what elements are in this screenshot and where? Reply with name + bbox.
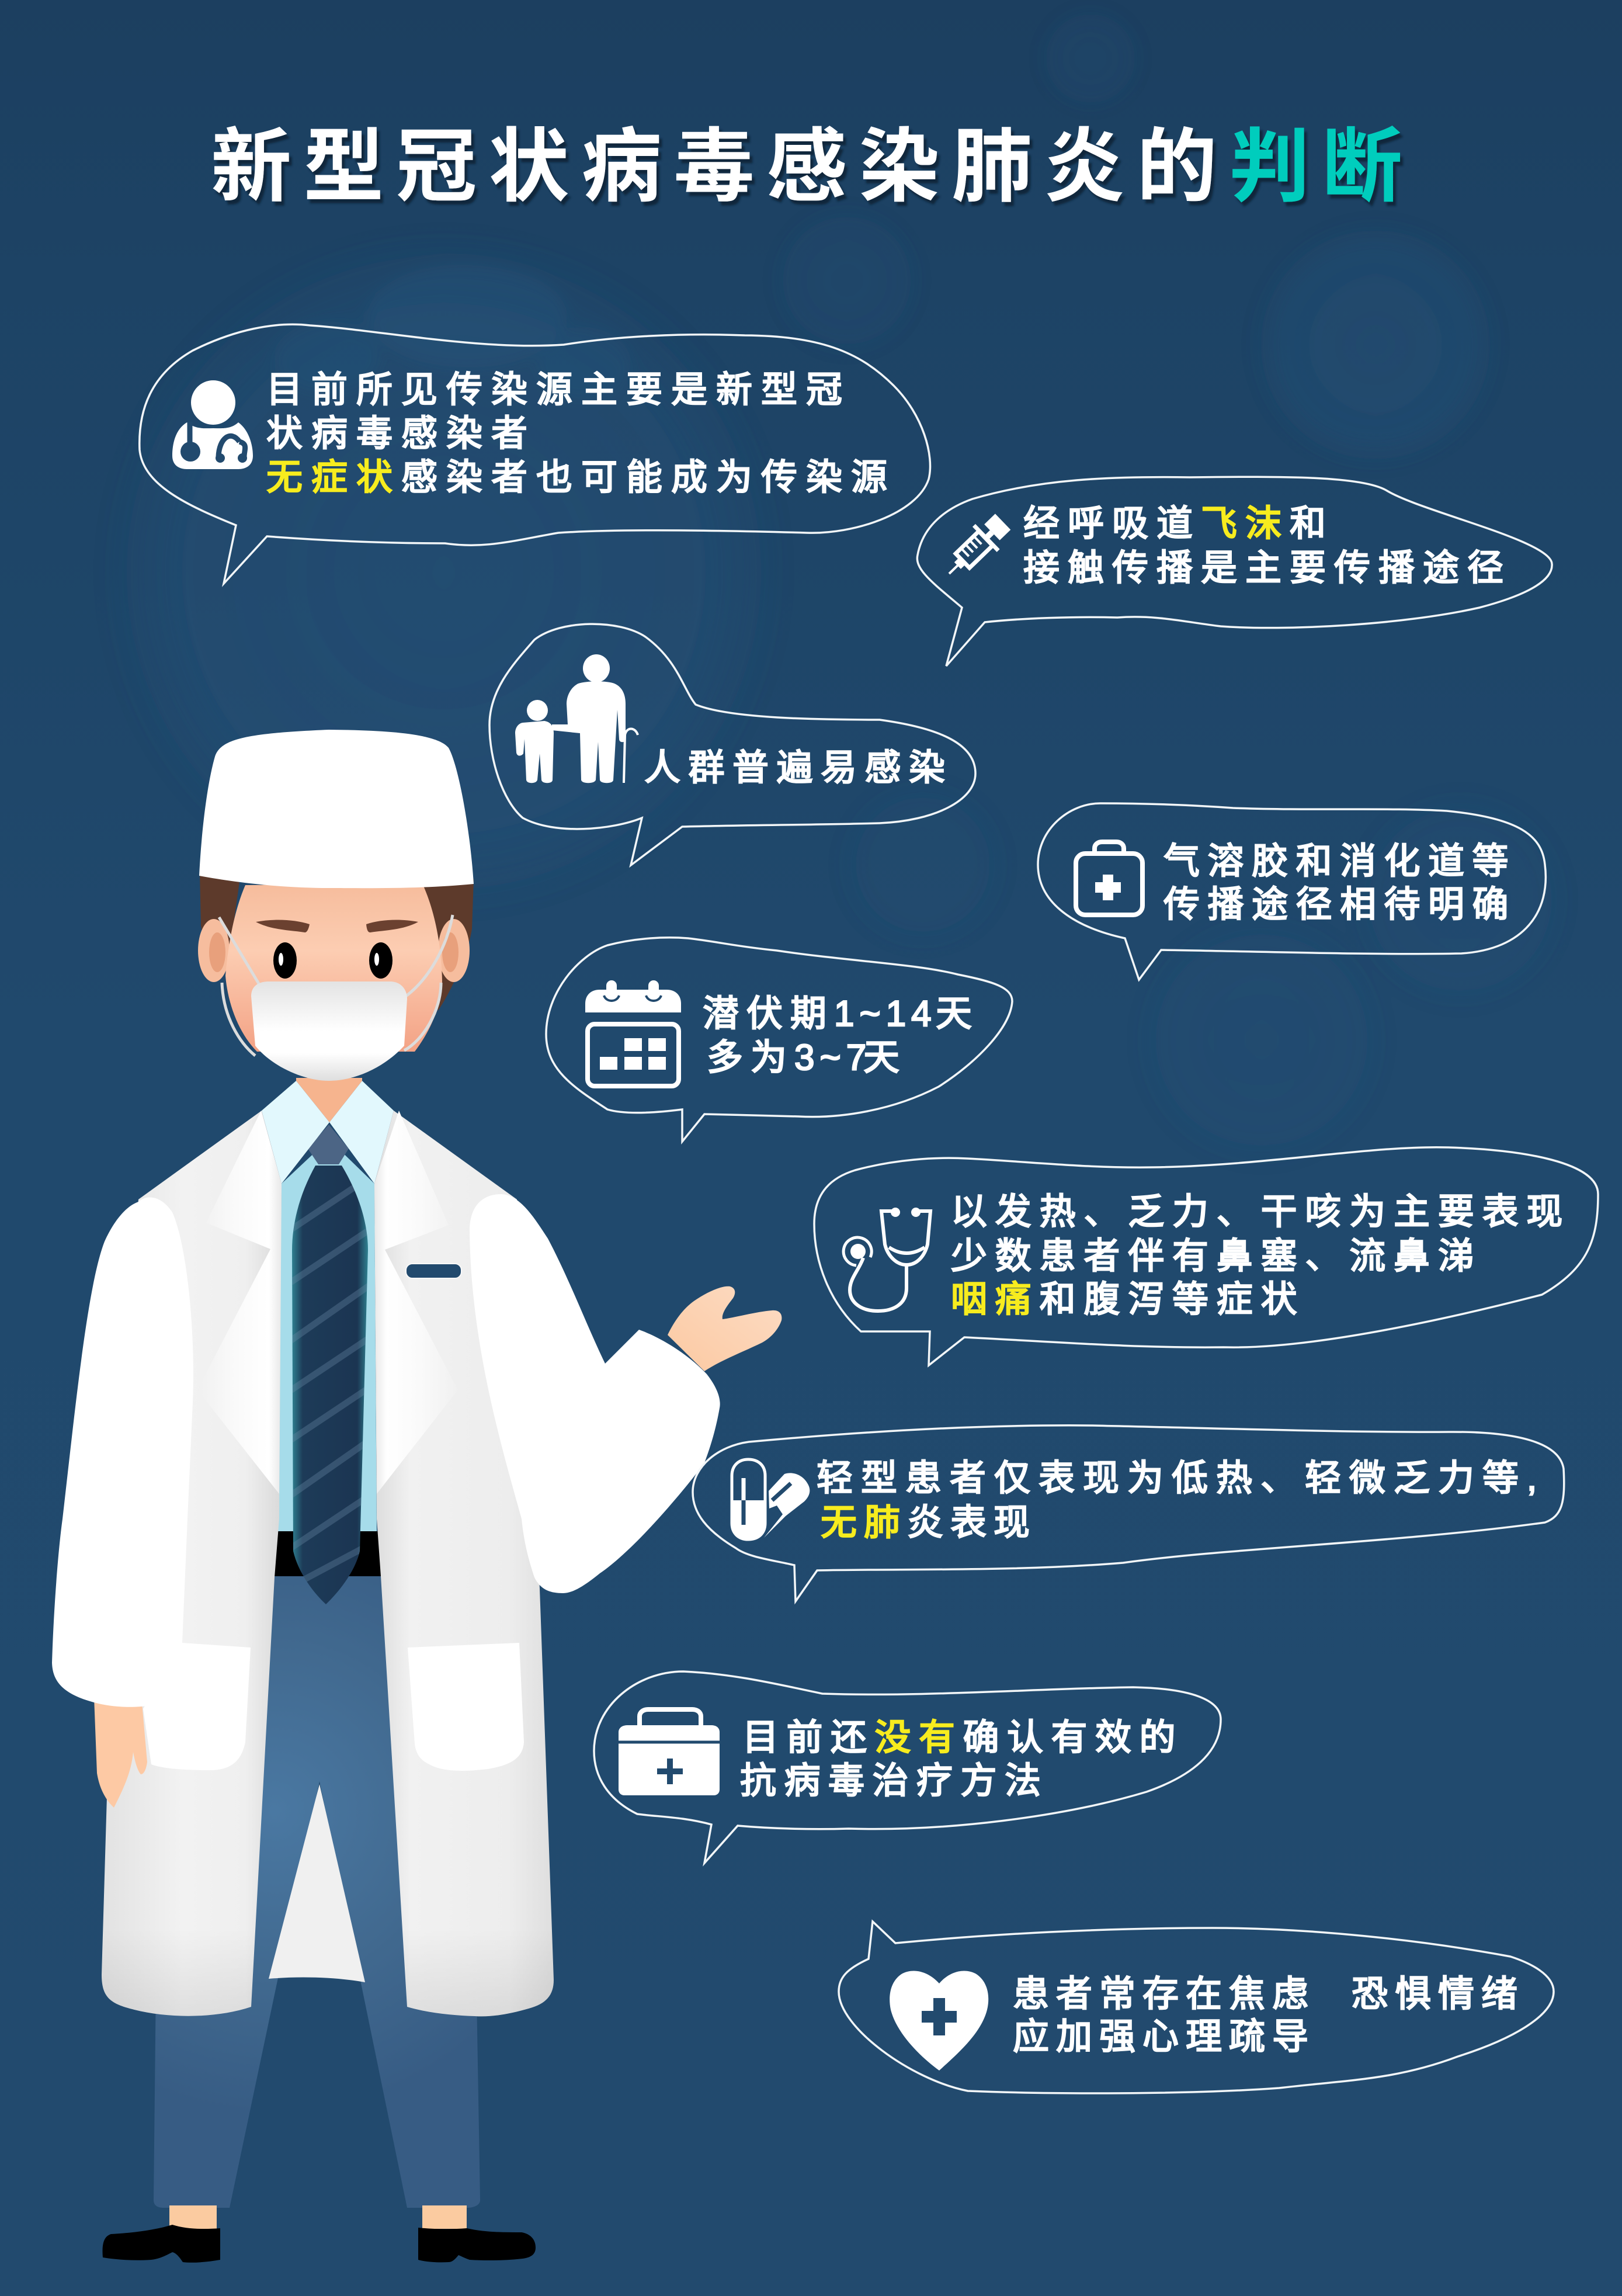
icon: first aid kit solid <box>619 1709 720 1795</box>
eyebrows <box>256 920 418 932</box>
left lapel <box>197 1111 282 1494</box>
speech bubble: mild patients <box>693 1426 1564 1601</box>
left sleeve <box>52 1198 193 1707</box>
hat <box>199 730 474 888</box>
face mask <box>251 981 407 1081</box>
title: 新型冠状病毒感染肺炎的判断 <box>211 122 1415 212</box>
bubble outline <box>693 1426 1564 1601</box>
bubble text: 目前所见传染源主要是新型冠 <box>266 370 851 410</box>
mask straps <box>219 915 453 1056</box>
bubble text: 目前还没有确认有效的 <box>742 1718 1183 1758</box>
speech bubble: general susceptibility <box>489 624 975 865</box>
left pocket <box>143 1643 251 1770</box>
speech bubble: symptoms <box>814 1147 1598 1365</box>
coat: right panel <box>374 1111 554 2016</box>
icon: syringe <box>937 509 1015 587</box>
bubble outline <box>1038 803 1545 980</box>
bubble text: 无症状感染者也可能成为传染源 <box>266 457 896 498</box>
icon: heart with cross <box>890 1971 988 2070</box>
coat inner back <box>269 1784 365 1982</box>
right sleeve <box>470 1194 720 1593</box>
doctor illustration <box>52 730 782 2263</box>
bubble outline <box>917 477 1552 666</box>
bubble text: 多为 <box>707 1038 794 1078</box>
right pocket <box>408 1643 524 1771</box>
ankles <box>169 2205 467 2229</box>
speech bubble: psychological support <box>839 1922 1554 2093</box>
left hand <box>94 1697 147 1808</box>
bubble text: 天 <box>863 1038 908 1078</box>
right shoe <box>418 2228 536 2262</box>
right lapel <box>374 1111 458 1494</box>
left ear <box>198 919 230 982</box>
bubble text: 气溶胶和消化道等 <box>1163 841 1516 882</box>
icon: doctor <box>172 380 253 469</box>
bubble text: 传播途径相待明确 <box>1163 885 1516 925</box>
bubble text: 应加强心理疏导 <box>1013 2017 1315 2057</box>
background: faint virus particles <box>99 6 1571 1168</box>
icon: medical case outline <box>1076 842 1142 915</box>
neck <box>296 1078 362 1122</box>
speech bubble: transmission routes <box>917 477 1552 666</box>
tie knot <box>308 1125 349 1164</box>
bubble text: 患者常存在焦虑 <box>1013 1974 1315 2014</box>
name badge <box>406 1264 461 1278</box>
tie <box>292 1166 368 1604</box>
speech bubble: aerosol routes <box>1038 803 1545 980</box>
bubble text: 接触传播是主要传播途径 <box>1023 548 1512 588</box>
bubble outline <box>814 1147 1598 1365</box>
hair <box>200 873 474 1011</box>
bubble text: 天 <box>936 994 981 1034</box>
bubble text: 少数患者伴有鼻塞、流鼻涕 <box>951 1236 1482 1277</box>
shirt <box>277 1139 377 1534</box>
right ear <box>438 919 470 982</box>
right hand <box>668 1286 782 1371</box>
belt <box>275 1531 383 1576</box>
bubble outline <box>140 324 930 584</box>
bubble text: 恐惧情绪 <box>1352 1974 1524 2014</box>
bubble text: 经呼吸道飞沫和 <box>1023 504 1334 544</box>
bubble text: 抗病毒治疗方法 <box>740 1761 1049 1801</box>
bubble text: 以发热、乏力、干咳为主要表现 <box>951 1192 1571 1232</box>
coat hem shading <box>102 1577 554 2016</box>
bubble text: 3~7 <box>794 1038 871 1078</box>
icon: calendar <box>585 980 681 1086</box>
bubble text: 潜伏期 <box>703 994 834 1034</box>
bubble outline <box>546 938 1012 1142</box>
bubble text: 轻型患者仅表现为低热、轻微乏力等, <box>817 1458 1545 1499</box>
bubble text: 1~14 <box>834 994 937 1034</box>
left shoe <box>103 2225 220 2263</box>
bubble text: 人群普遍易感染 <box>644 748 953 788</box>
speech bubble: incubation period <box>546 938 1012 1142</box>
legs and trousers <box>154 1576 480 2208</box>
bubble text: 状病毒感染者 <box>266 414 536 454</box>
icon: stethoscope <box>843 1208 930 1311</box>
bubble outline <box>594 1671 1221 1863</box>
coat: left panel <box>102 1111 282 2016</box>
bubble outline <box>489 624 975 865</box>
icon: elder and child <box>515 654 638 783</box>
bubble text: 无肺炎表现 <box>821 1503 1037 1543</box>
bubble outline <box>839 1922 1554 2093</box>
speech bubble: infection source <box>140 324 930 584</box>
speech bubble: no antiviral treatment <box>594 1671 1221 1863</box>
collar <box>262 1081 394 1184</box>
bubble text: 咽痛和腹泻等症状 <box>951 1279 1305 1320</box>
eyes <box>273 942 393 979</box>
face <box>225 883 442 1052</box>
icon: pills <box>732 1459 810 1539</box>
